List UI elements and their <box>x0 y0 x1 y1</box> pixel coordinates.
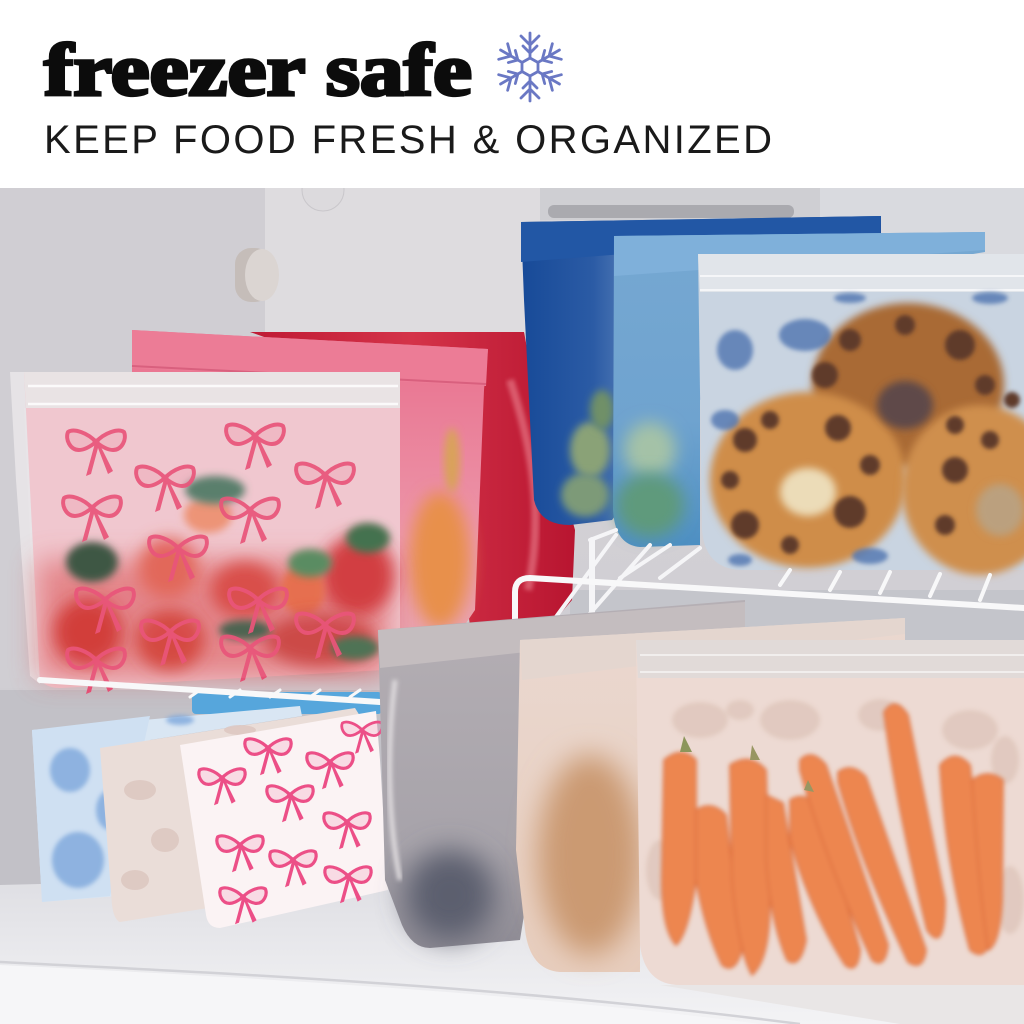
bagel speckles <box>721 315 1020 554</box>
wall knob <box>235 248 279 302</box>
bag: strawberries with bows <box>10 372 400 694</box>
bag: sky blue <box>613 232 985 547</box>
soft frost overlay <box>660 703 1004 974</box>
carrots <box>662 704 1003 975</box>
ice pack: pink bows <box>180 711 388 928</box>
bag: bagels with blue floral <box>698 254 1024 575</box>
subtitle: KEEP FOOD FRESH & ORGANIZED <box>44 118 772 162</box>
bag: peach <box>516 618 905 972</box>
icon: snowflake <box>496 33 564 101</box>
bag: navy blue <box>521 216 881 525</box>
ice packs <box>32 706 388 928</box>
bow pattern <box>63 425 354 694</box>
ice pack: blue floral <box>32 706 302 902</box>
floor strip below carrot bag <box>660 985 1024 1024</box>
white header background <box>0 0 1024 188</box>
wire shelf: front rails <box>40 570 1024 702</box>
blue container under shelf <box>192 692 382 714</box>
pink bag <box>132 330 488 629</box>
title: freezer safe: freezer safe <box>44 30 472 112</box>
bag: carrots with leopard print <box>636 640 1024 985</box>
fridge walls <box>0 188 1024 885</box>
fridge floor <box>0 884 900 1024</box>
wire shelf: back wires <box>550 530 700 625</box>
bag: grey <box>378 600 745 948</box>
red bag <box>250 332 575 626</box>
ice pack: leopard beige <box>100 708 360 922</box>
floral print <box>711 292 1008 566</box>
